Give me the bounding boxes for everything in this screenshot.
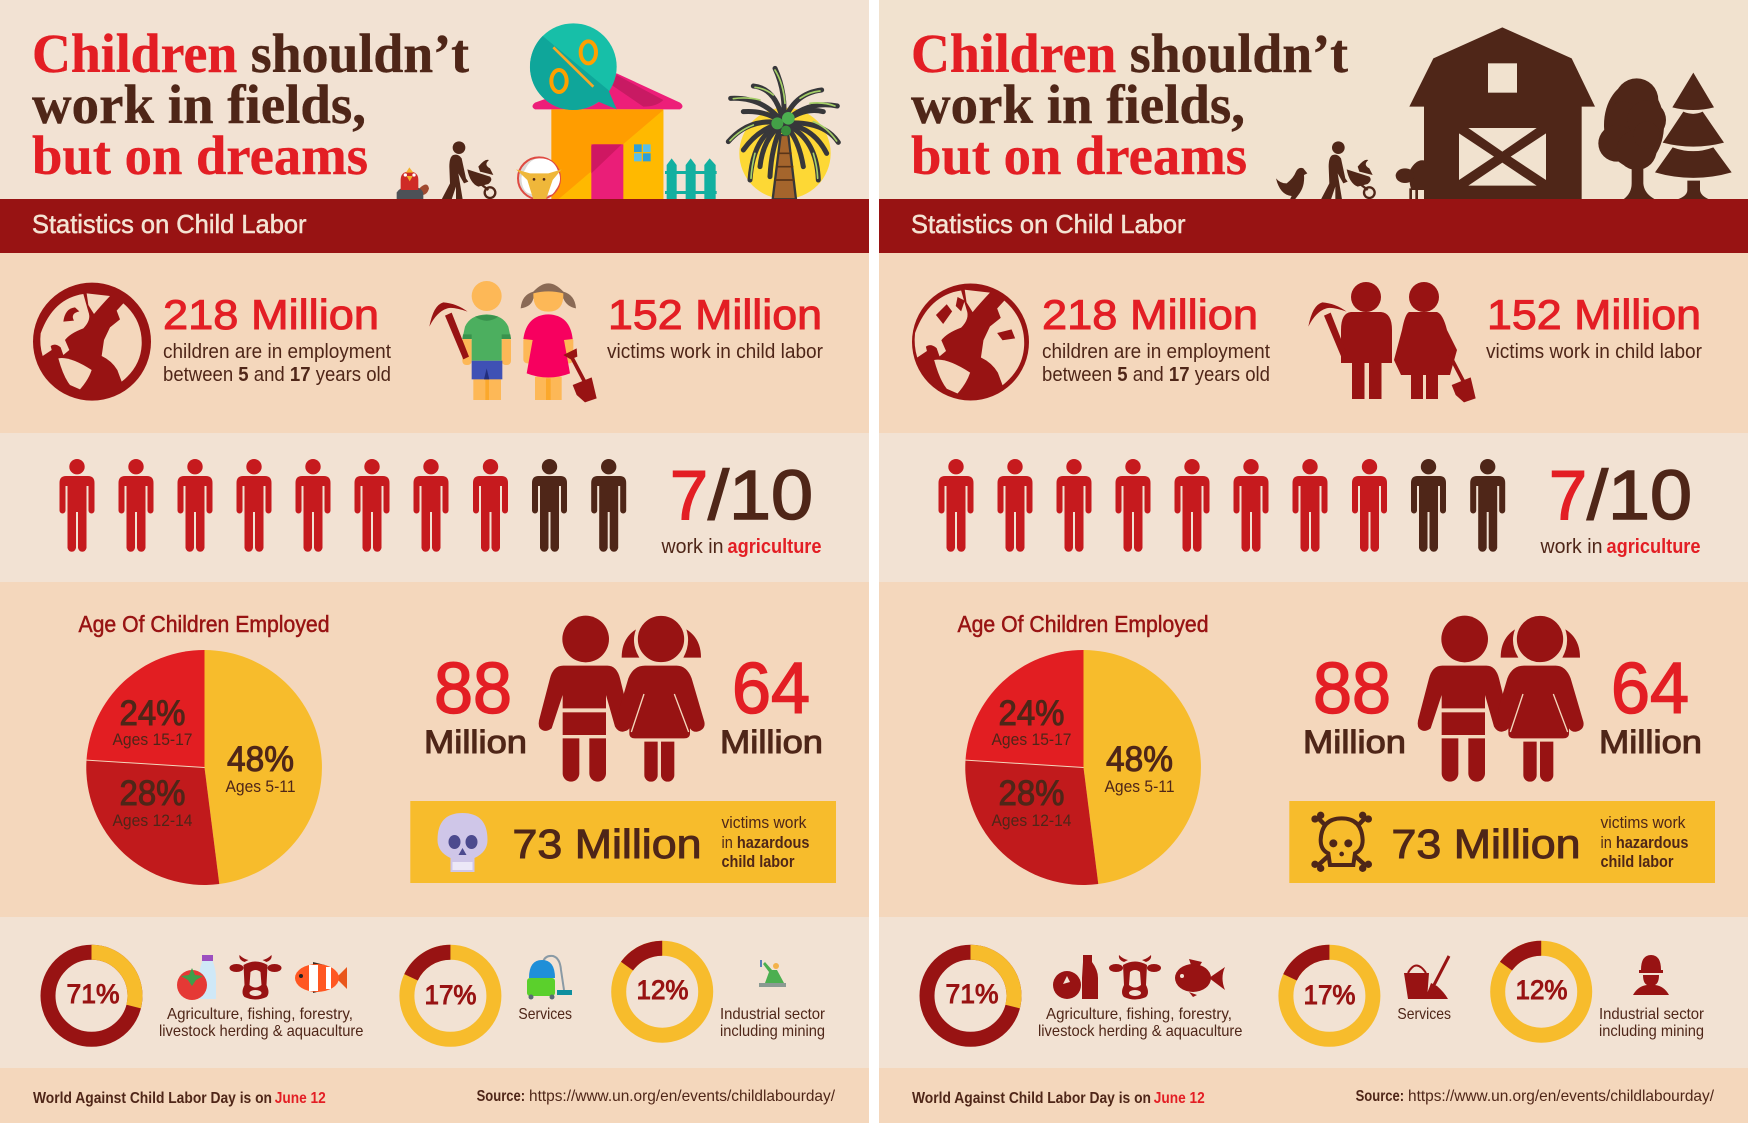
stat: 88 million boys: Million (424, 724, 527, 760)
pickaxe (1308, 302, 1348, 359)
girl (1394, 282, 1457, 399)
callout: 73 million hazardous: 73 Million (512, 821, 702, 867)
title: work in fields, (911, 74, 1245, 135)
callout: 73 million hazardous: 73 Million (1392, 821, 1580, 867)
stat: 88 million boys: 88 (434, 649, 512, 729)
panel: colourful infographic (0, 0, 869, 1123)
pickaxe (429, 302, 469, 359)
panel: silhouette infographic (879, 0, 1748, 1123)
icon: person with wheelbarrow (442, 141, 495, 199)
icon: tomato and bottle silhouette (1053, 955, 1098, 999)
section backgrounds (879, 0, 1748, 1123)
pie chart: Ages 5-11 (226, 777, 296, 796)
stat: 7/10: /10 (708, 456, 813, 534)
red band: Statistics on Child Labor (911, 209, 1186, 239)
shovel (1448, 354, 1476, 402)
pie chart heading: Age Of Children Employed (78, 611, 330, 637)
donut: 71% (48, 952, 135, 1039)
label: industrial sector (720, 1006, 826, 1040)
callout: 73 million hazardous: in hazardous (1600, 833, 1688, 852)
icon: rooster (397, 167, 429, 200)
pie chart (965, 650, 1201, 885)
label: agriculture sector: Agriculture, fishing, forestry, (1046, 1006, 1232, 1023)
footer note: June 12 (1154, 1090, 1205, 1107)
stat: 218 million (163, 291, 391, 386)
title: Children shouldn’t (911, 23, 1349, 84)
stat: 64 million girls: Million (720, 724, 823, 760)
callout: 73 million hazardous (410, 801, 836, 883)
icon: round tree (1598, 78, 1666, 199)
title (32, 23, 470, 186)
shovel (563, 348, 597, 402)
stat: 218 million: children are in employment (1042, 341, 1270, 363)
icon: green worker (759, 960, 786, 987)
icon: globe (33, 283, 151, 401)
pie chart: 24% (998, 694, 1064, 733)
label: industrial sector: Industrial sector (1599, 1006, 1705, 1023)
illustration: colourful farm scene (397, 23, 838, 200)
title: work in fields, (32, 74, 366, 135)
donut: 17%: 17% (1304, 980, 1356, 1010)
callout: 73 million hazardous: victims work (1600, 813, 1686, 832)
footer source: Source: (477, 1088, 525, 1105)
red band (0, 199, 869, 253)
stat: 152 million: 152 Million (1487, 291, 1701, 338)
footer note: June 12 (275, 1090, 326, 1107)
icon: palm tree (728, 68, 838, 199)
title (911, 23, 1349, 186)
icon: cow (1109, 955, 1161, 1000)
label: agriculture sector: Agriculture, fishing, forestry, (167, 1006, 353, 1023)
icon: skull and crossbones (1311, 812, 1372, 872)
donut: 12% (1480, 931, 1602, 1052)
donut: 71%: 71% (66, 979, 120, 1009)
stat: 7/10 (1540, 456, 1700, 558)
illustration: silhouette farm scene (1276, 27, 1732, 199)
callout: 73 million hazardous: in hazardous (722, 833, 810, 852)
pie chart: 48% (1106, 740, 1173, 779)
title: Children shouldn’t (32, 23, 470, 84)
stat: 7/10 (661, 456, 822, 558)
icon: boy and girl holding hands (1418, 615, 1584, 782)
section backgrounds (0, 0, 869, 1123)
callout: 73 million hazardous: child labor (722, 852, 795, 871)
title: but on dreams (32, 125, 368, 186)
icon: tomato and milk bottle (177, 955, 216, 1000)
pie chart (86, 650, 322, 885)
icon: sheep silhouette (1396, 160, 1425, 199)
stat: 218 million: between 5 and 17 years old (1042, 364, 1270, 386)
donut: 17% (1272, 938, 1387, 1054)
stat: 88 million boys (1303, 649, 1406, 760)
callout: 73 million hazardous (1289, 801, 1715, 883)
pie chart: 28% (120, 774, 186, 813)
label: services: Services (518, 1006, 572, 1023)
label: industrial sector (1599, 1006, 1705, 1040)
icon: person with wheelbarrow (1321, 141, 1375, 199)
icon: hen (1276, 168, 1307, 199)
icon: cow (230, 955, 282, 1000)
stat: 152 million (607, 291, 823, 363)
donut: 12%: 12% (1516, 975, 1568, 1005)
stat: 218 million: between 5 and 17 years old (163, 364, 391, 386)
stat: 7/10: work in (661, 536, 724, 558)
icon: detailed globe (912, 284, 1029, 400)
stat: 152 million: victims work in child labor (1486, 341, 1702, 363)
callout: 73 million hazardous: victims work (722, 813, 807, 832)
donut: 71%: 71% (946, 979, 998, 1009)
boy (1341, 282, 1392, 399)
stat: 88 million boys (424, 649, 527, 760)
icon: pine tree (1655, 73, 1732, 199)
footer note: World Against Child Labor Day is on (912, 1090, 1151, 1107)
label: agriculture sector (1038, 1006, 1243, 1040)
pictogram: ten people (60, 459, 626, 552)
pie chart heading: Age Of Children Employed (958, 611, 1208, 637)
stat: 7/10: agriculture (1606, 536, 1700, 558)
stat: 64 million girls: 64 (732, 649, 810, 729)
red band (879, 199, 1748, 253)
stat: 218 million: 218 Million (1042, 291, 1258, 338)
stat: 7/10: 7 (670, 456, 708, 534)
label: agriculture sector (159, 1006, 364, 1040)
label: services: Services (1397, 1006, 1451, 1023)
donut: 12%: 12% (636, 975, 688, 1005)
pie chart: Ages 15-17 (992, 730, 1072, 749)
pie chart: Ages 5-11 (1104, 777, 1174, 796)
stat: 152 million: victims work in child labor (607, 341, 823, 363)
icon: percent speech bubble (530, 23, 617, 110)
stat: 7/10: work in (1540, 536, 1602, 558)
label: agriculture sector: livestock herding & aquaculture (1038, 1023, 1243, 1040)
stat: 64 million girls (1599, 649, 1702, 760)
icon: children with tools (429, 281, 597, 402)
icon: barn (1409, 27, 1595, 199)
icon: clownfish (295, 962, 347, 993)
donut: 71% (927, 952, 1014, 1039)
stat: 7/10: /10 (1587, 456, 1692, 534)
donut: 17% (393, 938, 508, 1054)
icon: vacuum cleaner (527, 956, 572, 1000)
pie chart: 28% (998, 774, 1064, 813)
label: agriculture sector: livestock herding & aquaculture (159, 1023, 364, 1040)
stat: 218 million (1042, 291, 1270, 386)
boy (462, 281, 511, 400)
callout: 73 million hazardous: child labor (1600, 852, 1674, 871)
footer source: https://www.un.org/en/events/childlabourday/ (1408, 1088, 1715, 1105)
icon: purple skull (438, 813, 488, 872)
stat: 7/10: 7 (1549, 456, 1587, 534)
icon: sheep (516, 157, 562, 199)
pictogram: ten people (938, 459, 1505, 552)
icon: bucket and mop (1404, 956, 1449, 999)
stat: 152 million (1486, 291, 1702, 363)
icon: fish silhouette (1175, 959, 1225, 997)
label: industrial sector: including mining (720, 1023, 825, 1040)
icon: fence (665, 158, 717, 199)
pie chart: 24% (120, 694, 186, 733)
pie chart: 48% (227, 740, 294, 779)
icon: miner with helmet (1633, 955, 1669, 995)
donut: 17%: 17% (424, 980, 476, 1010)
label: industrial sector: Industrial sector (720, 1006, 826, 1023)
donut: 12% (601, 931, 723, 1052)
icon: house (532, 73, 682, 199)
stat: 218 million: children are in employment (163, 341, 391, 363)
stat: 64 million girls: Million (1599, 724, 1702, 760)
stat: 7/10: agriculture (728, 536, 822, 558)
stat: 152 million: 152 Million (608, 291, 822, 338)
title: but on dreams (911, 125, 1247, 186)
footer note: World Against Child Labor Day is on (33, 1090, 272, 1107)
stat: 64 million girls: 64 (1611, 649, 1689, 729)
icon: silhouette children with tools (1308, 282, 1476, 402)
pie chart: Ages 12-14 (112, 811, 192, 830)
stat: 218 million: 218 Million (163, 291, 379, 338)
girl (521, 283, 576, 400)
pie chart: Ages 12-14 (992, 811, 1072, 830)
stat: 88 million boys: Million (1303, 724, 1406, 760)
stat: 88 million boys: 88 (1313, 649, 1391, 729)
red band: Statistics on Child Labor (32, 209, 307, 239)
footer source: Source: (1356, 1088, 1404, 1105)
pie chart: Ages 15-17 (112, 730, 192, 749)
footer source: https://www.un.org/en/events/childlabourday/ (529, 1088, 836, 1105)
stat: 64 million girls (720, 649, 823, 760)
icon: boy and girl holding hands (539, 615, 705, 782)
label: industrial sector: including mining (1599, 1023, 1704, 1040)
